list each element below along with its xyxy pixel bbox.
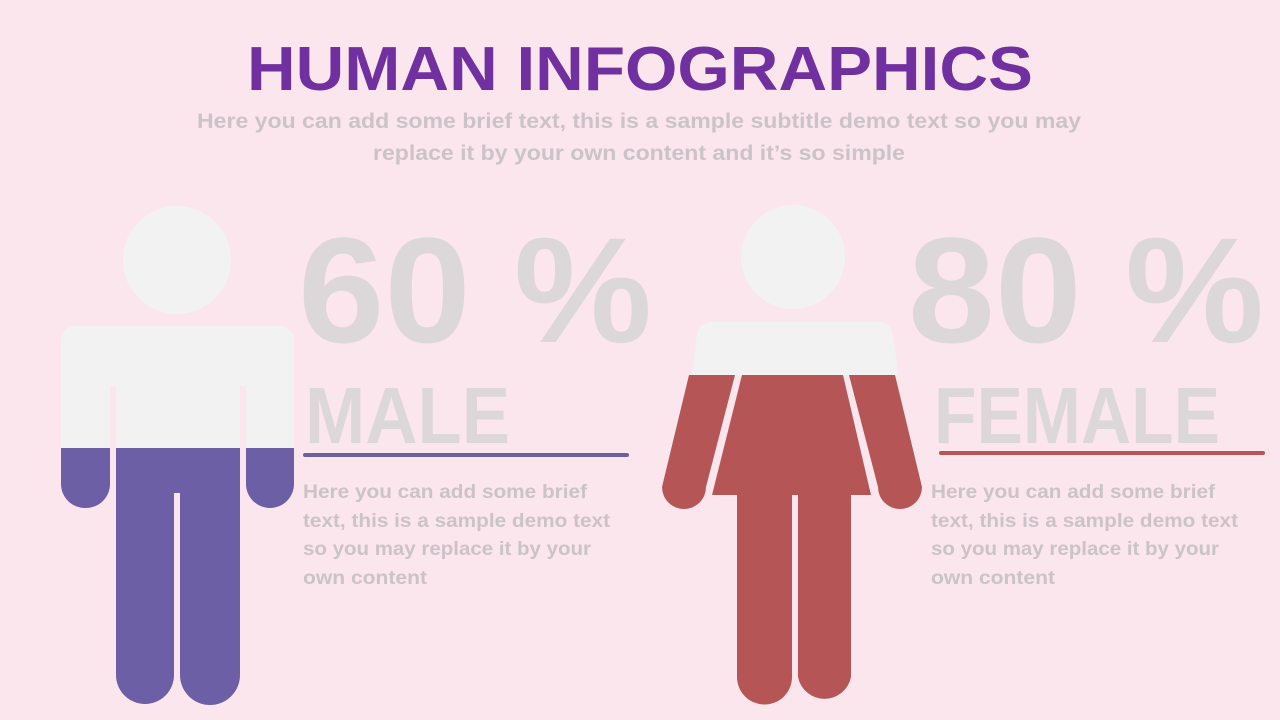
label: FEMALE: FEMALE xyxy=(934,371,1220,460)
icon: female figure xyxy=(662,205,922,705)
subtitle xyxy=(197,110,1081,165)
subtitle: replace it by your own content and it’s so simple xyxy=(373,142,905,165)
text: male description: Here you can add some brief xyxy=(303,482,588,503)
divider female xyxy=(939,451,1265,455)
icon: male figure xyxy=(61,206,294,705)
stat: 80 %: 80 % xyxy=(908,206,1264,374)
title: HUMAN INFOGRAPHICS xyxy=(247,35,1033,104)
text: male description: so you may replace it by your xyxy=(303,539,592,560)
label: MALE: MALE xyxy=(305,371,510,460)
stat: 60 %: 60 % xyxy=(298,206,652,374)
text: female description: own content xyxy=(931,568,1056,589)
text: female description: text, this is a sample demo text xyxy=(931,511,1239,532)
text: male description: own content xyxy=(303,568,428,589)
text: female description: Here you can add some brief xyxy=(931,482,1216,503)
text: female description xyxy=(931,482,1239,589)
subtitle: Here you can add some brief text, this is a sample subtitle demo text so you may xyxy=(197,110,1081,133)
text: male description: text, this is a sample demo text xyxy=(303,511,611,532)
text: female description: so you may replace it by your xyxy=(931,539,1220,560)
text: male description xyxy=(303,482,611,589)
divider male xyxy=(303,453,629,457)
